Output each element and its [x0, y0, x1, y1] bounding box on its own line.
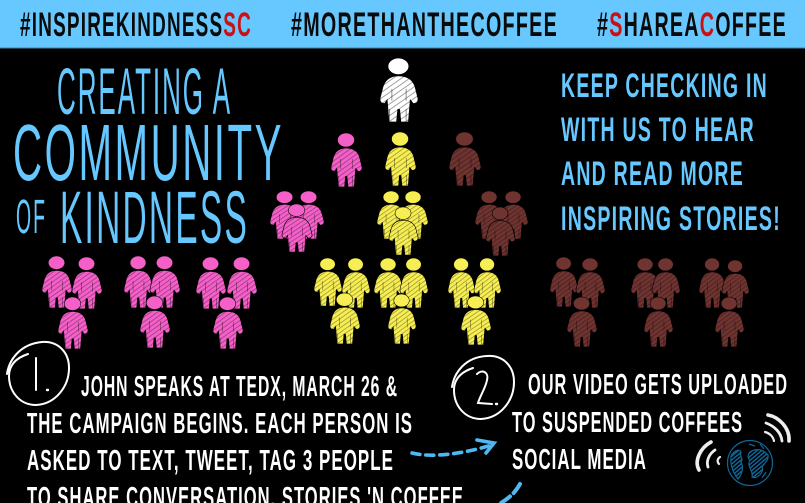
step 2 text — [512, 369, 788, 476]
title: COMMUNITY — [13, 108, 284, 197]
title — [13, 54, 284, 259]
step 1 text: THE CAMPAIGN BEGINS. EACH PERSON IS — [27, 408, 413, 440]
step 1 number badge — [7, 342, 69, 405]
pink people tree — [42, 133, 362, 349]
yellow people tree — [314, 132, 501, 345]
icon: white top person — [380, 58, 418, 122]
step 2 number badge — [452, 356, 514, 419]
arrow: step 1 to step 2 — [412, 440, 494, 455]
arrow: continuing down from step 2 — [496, 484, 520, 503]
hashtag: inspire kindness: #INSPIREKINDNESSSC — [20, 6, 252, 44]
icon: globe with signal waves — [697, 415, 789, 486]
step 1 text — [27, 371, 464, 503]
title: OF — [16, 191, 47, 244]
hashtag: more than the coffee: #MORETHANTHECOFFEE — [291, 6, 558, 44]
callout: keep checking in — [561, 67, 781, 238]
title: CREATING A — [57, 54, 232, 128]
brown people tree — [449, 132, 749, 347]
globe — [728, 440, 772, 486]
signal waves — [697, 415, 789, 470]
header band — [0, 0, 805, 48]
step 1 text: JOHN SPEAKS AT TEDX, MARCH 26 & — [81, 371, 398, 403]
step 2 text: SOCIAL MEDIA — [512, 444, 647, 476]
step 1 text: ASKED TO TEXT, TWEET, TAG 3 PEOPLE — [27, 445, 394, 477]
title: KINDNESS — [60, 176, 249, 259]
